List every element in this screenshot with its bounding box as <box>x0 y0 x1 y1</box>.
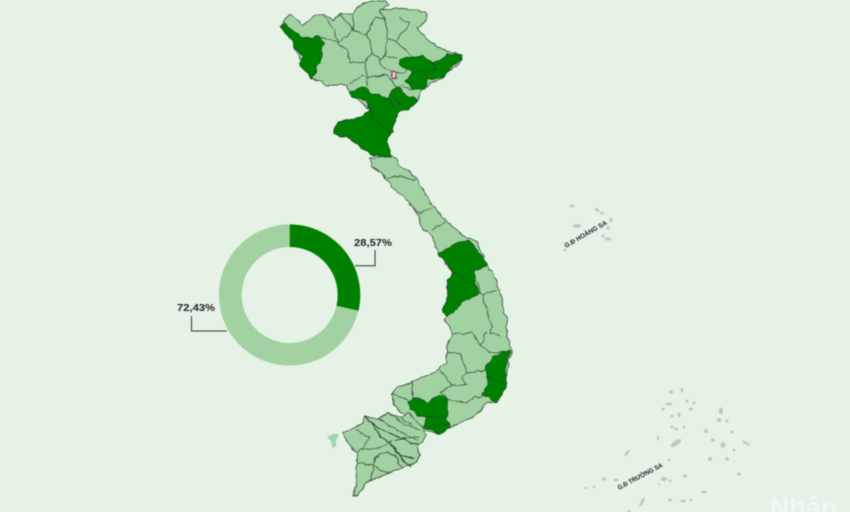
central region provinces <box>370 155 512 435</box>
donut segment: 72,43% <box>219 224 358 366</box>
highlighted provinces: south-east <box>408 395 450 435</box>
Mekong delta provinces <box>343 413 427 495</box>
map of Vietnam <box>280 0 512 495</box>
callout: 28,57% <box>354 238 392 266</box>
highlighted provinces: central highlands <box>438 240 487 316</box>
island: Phu Quoc <box>327 434 338 449</box>
callout: 72,43%: 72,43% <box>177 303 215 314</box>
label: Hoang Sa: G.Đ HOÀNG SA <box>562 218 609 250</box>
Hanoi marker <box>392 72 397 78</box>
label: Truong Sa: G.Đ TRƯỜNG SA <box>616 460 664 492</box>
Hoang Sa archipelago islands <box>564 204 612 252</box>
callout: 28,57%: 28,57% <box>354 238 392 249</box>
highlighted provinces: north-west <box>280 23 323 78</box>
donut segment: 28,57% <box>290 224 360 311</box>
donut chart <box>219 224 360 366</box>
callout: 72,43% <box>177 303 227 331</box>
highlighted provinces: north-east <box>398 54 463 89</box>
highlighted provinces: north-central <box>333 87 418 157</box>
highlighted provinces: south-central coast <box>483 350 510 402</box>
Truong Sa archipelago islands <box>584 388 751 512</box>
northern region provinces <box>280 0 463 112</box>
